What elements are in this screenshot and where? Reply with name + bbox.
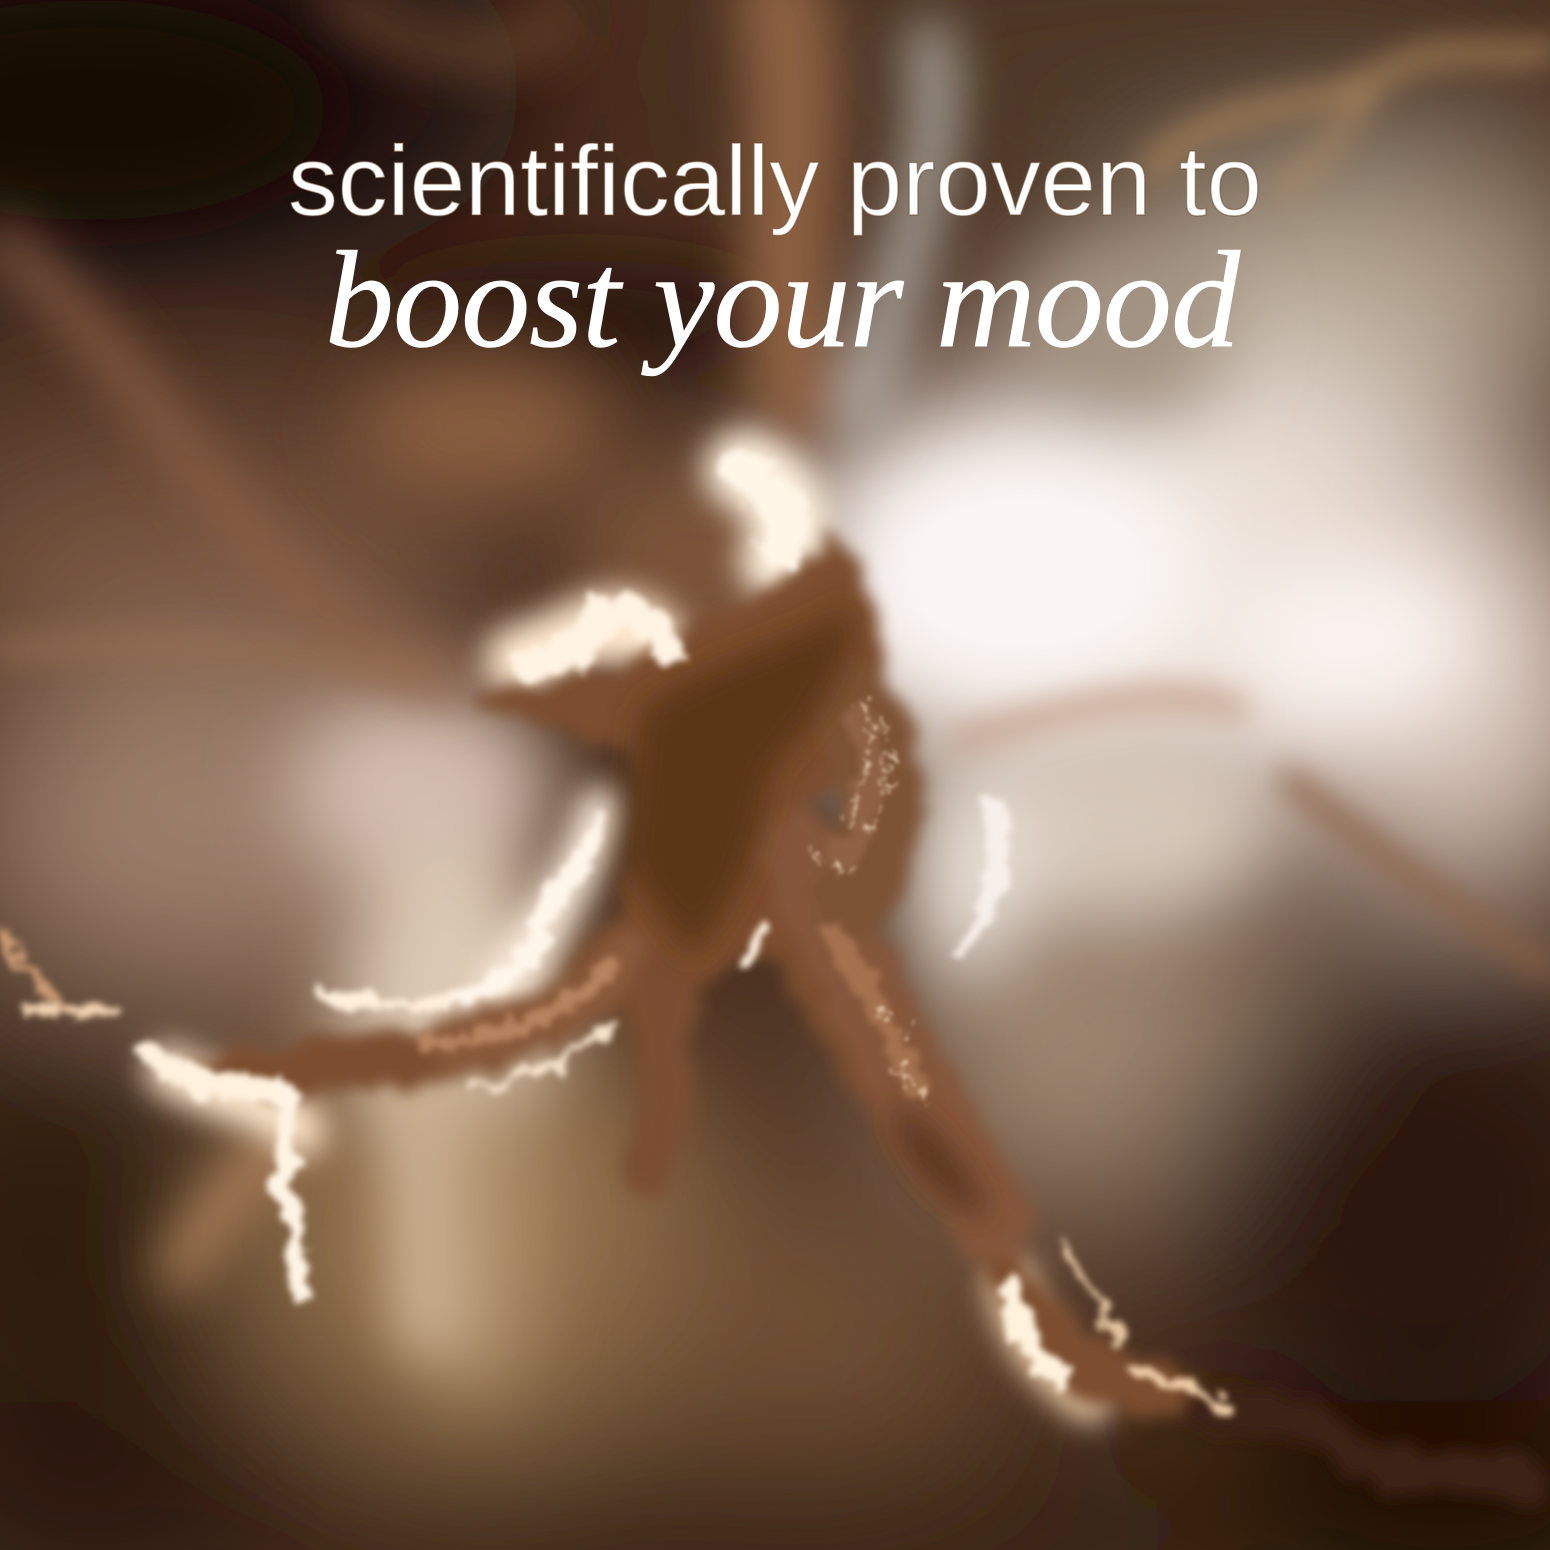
neuron bright highlights	[0, 470, 1230, 1410]
background faint dendrites	[0, 0, 935, 1320]
title	[288, 125, 1262, 376]
heading line: boost your mood: boost your mood	[325, 223, 1241, 376]
neuron texture: mottled brown	[420, 720, 915, 1085]
heading line: scientifically proven to: scientifically proven to	[288, 125, 1262, 236]
neuron dark core	[625, 600, 990, 1220]
neuron fine speckles	[810, 700, 930, 1100]
neuron glow halo	[170, 470, 1090, 1400]
neuron body and branches	[180, 530, 1550, 1510]
